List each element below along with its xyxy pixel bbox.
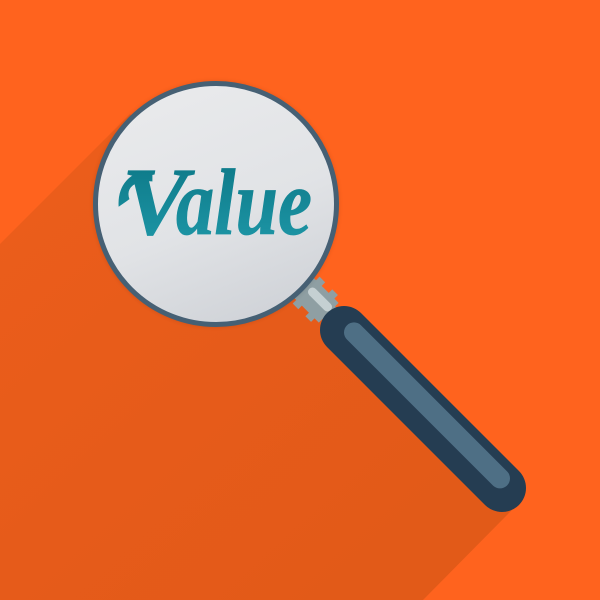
word: Value: V [122,148,195,255]
word: Value [119,148,312,255]
handle inset [354,332,500,478]
handle [344,330,502,488]
long shadow [0,114,512,600]
neck highlight [312,292,328,307]
word: Value: alue [176,151,312,255]
lens [93,81,339,327]
magnifier neck [281,265,352,336]
